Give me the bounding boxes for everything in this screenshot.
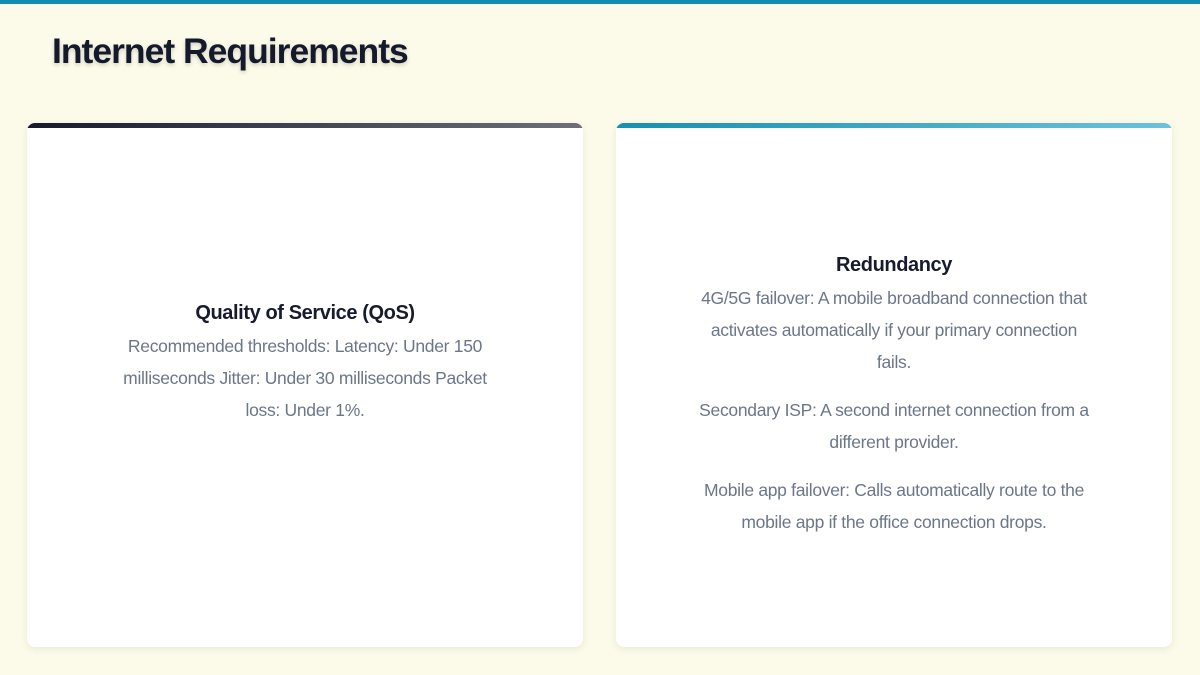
text: 4G/5G failover: 4G/5G failover: A mobile broadband connection that (701, 288, 1087, 308)
text: thresholds: Recommended thresholds: Latency: Under 150 (128, 336, 482, 356)
heading: redundancy: Redundancy (836, 254, 952, 276)
text: secondary ISP: different provider. (829, 432, 959, 452)
panel: quality of service (27, 123, 583, 647)
text: 4G/5G failover: fails. (877, 352, 911, 372)
text: mobile app failover: Mobile app failover: Calls automatically route to the (704, 480, 1084, 500)
text: thresholds (123, 336, 487, 420)
heading: QoS: Quality of Service (QoS) (195, 302, 415, 324)
text: thresholds: loss: Under 1%. (245, 400, 365, 420)
text: thresholds: milliseconds Jitter: Under 30 milliseconds Packet (123, 368, 487, 388)
text: 4G/5G failover: activates automatically if your primary connection (711, 320, 1077, 340)
text: mobile app failover: mobile app if the office connection drops. (741, 512, 1047, 532)
text: 4G/5G failover (701, 288, 1088, 372)
text: secondary ISP (699, 400, 1090, 452)
text: mobile app failover (704, 480, 1084, 532)
panel: redundancy (616, 123, 1172, 647)
title: Internet Requirements (52, 31, 408, 71)
text: secondary ISP: Secondary ISP: A second internet connection from a (699, 400, 1089, 420)
